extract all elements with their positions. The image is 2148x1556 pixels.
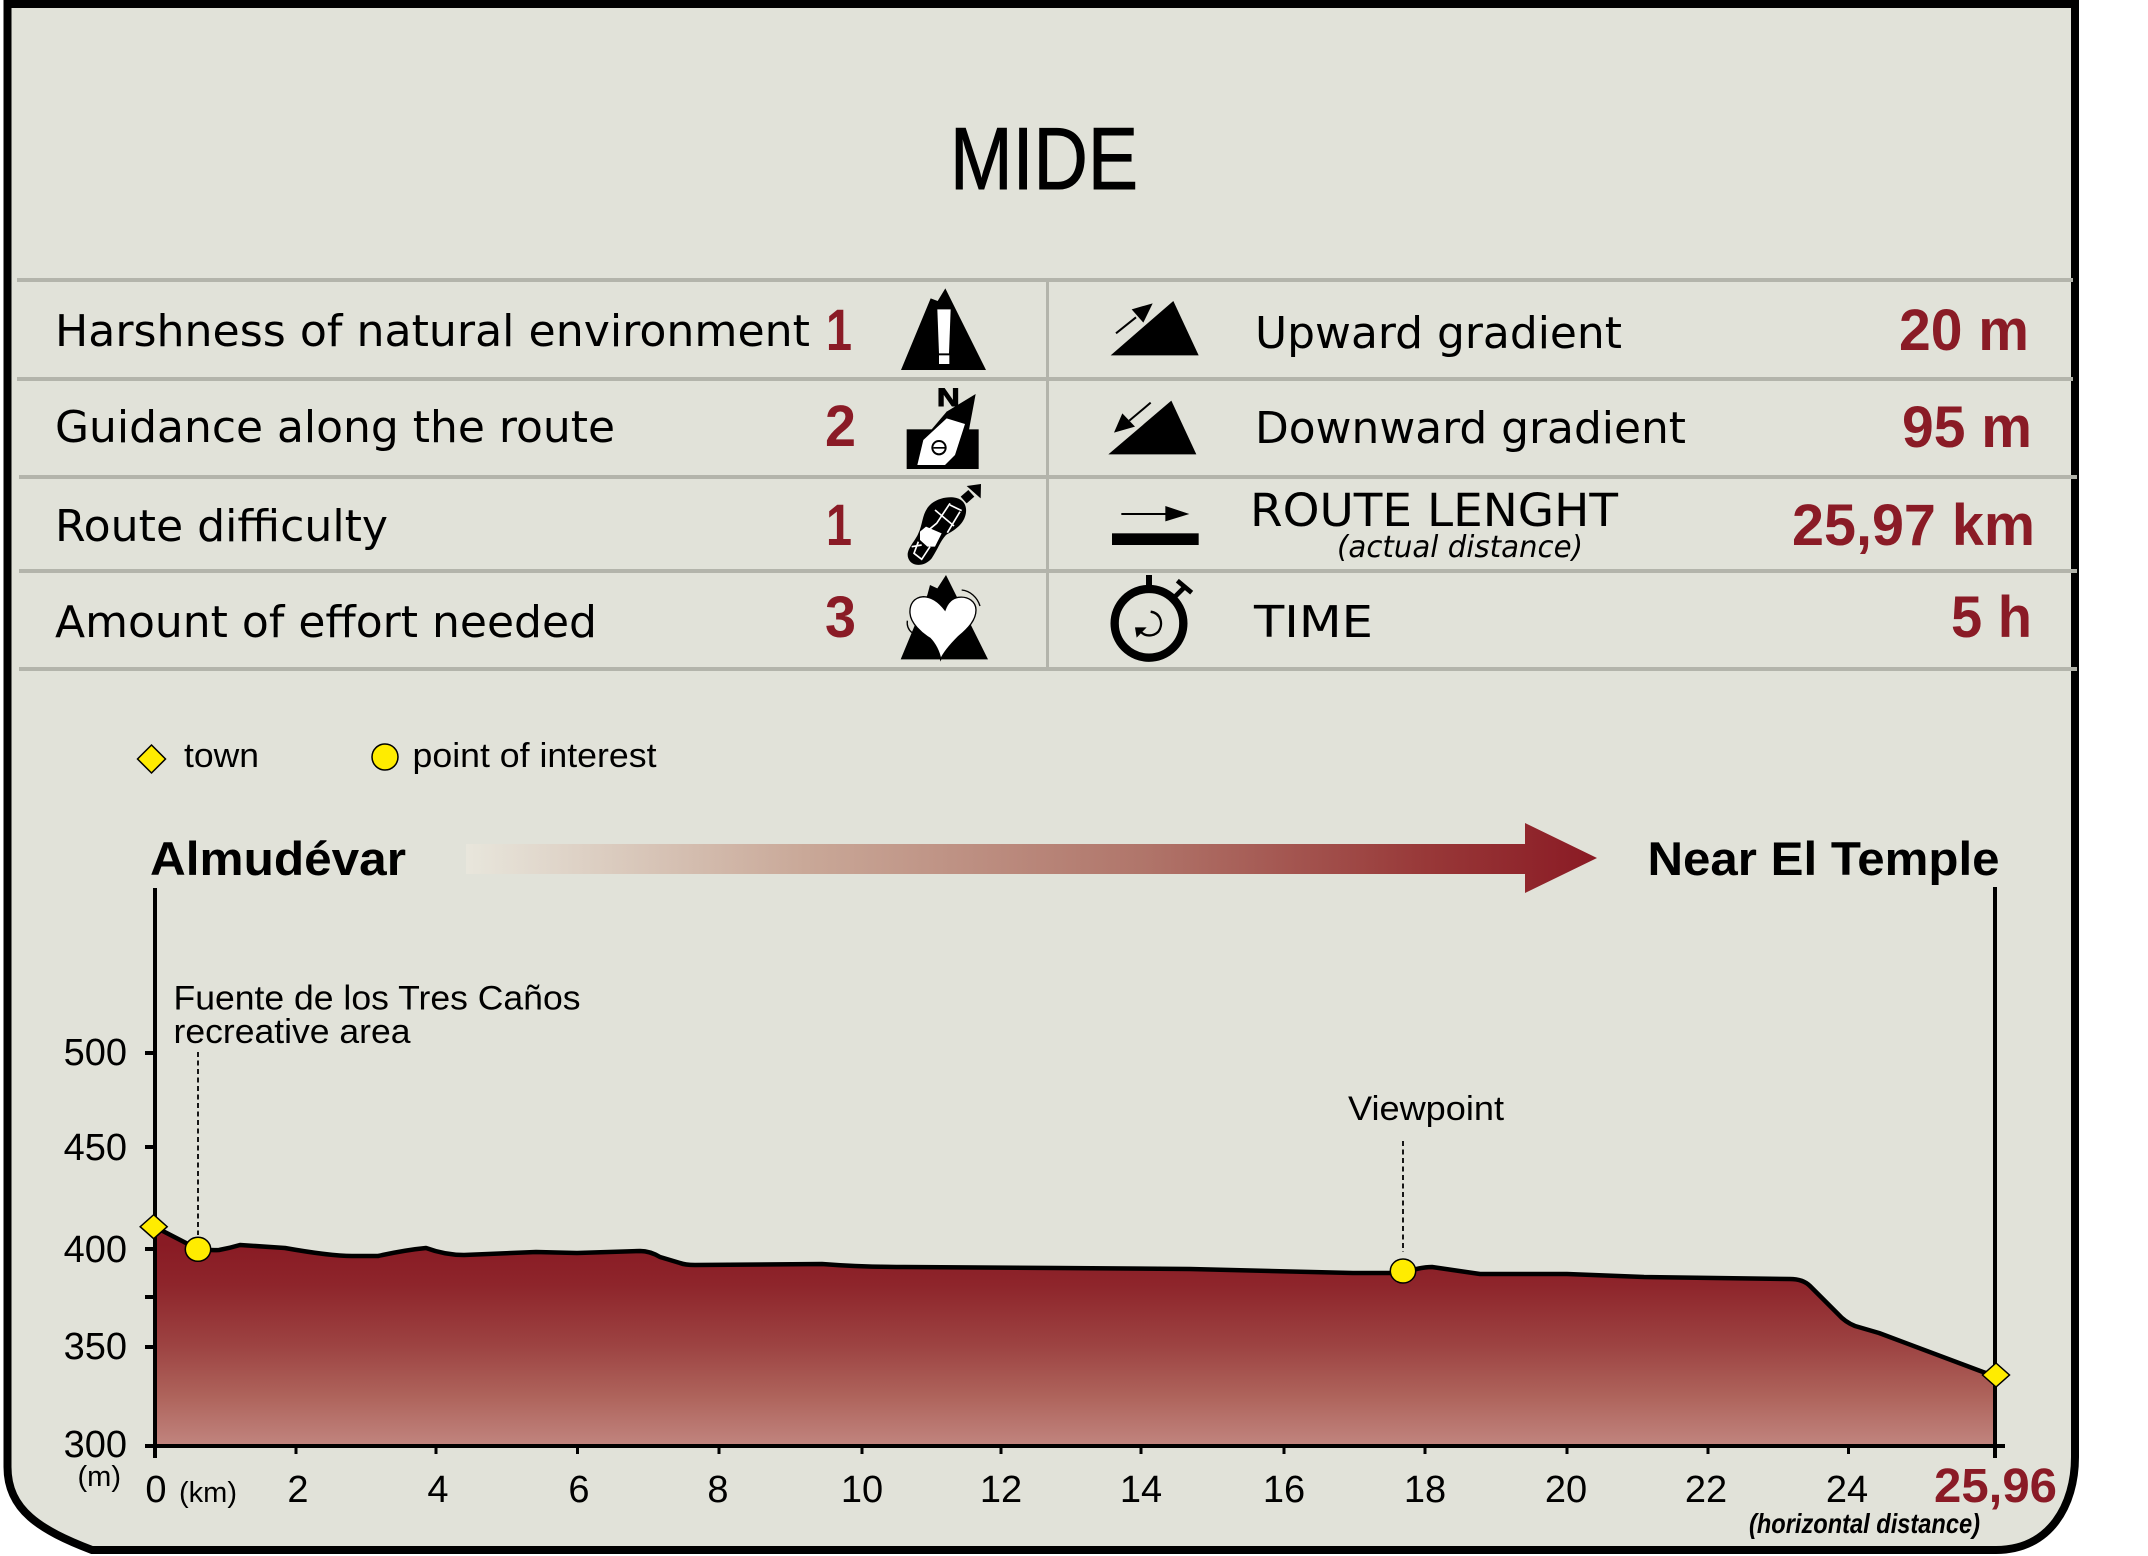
label: route difficulty: Route difficulty	[55, 501, 388, 552]
value: route difficulty: 1	[826, 493, 852, 558]
x axis labels: 18	[1404, 1469, 1446, 1511]
x axis labels: 10	[841, 1469, 883, 1511]
callout: Viewpoint: Viewpoint	[1348, 1090, 1504, 1128]
x axis labels: 12	[980, 1469, 1022, 1511]
value: upward gradient: 20 m	[1899, 298, 2029, 363]
legend label: town: town	[184, 737, 259, 775]
icon: point of interest circle	[372, 744, 398, 770]
icon: guidance compass	[907, 385, 979, 469]
icon: town diamond	[138, 745, 166, 773]
legend	[138, 737, 657, 775]
icon: guidance compass: N	[937, 385, 960, 412]
value: downward gradient: 95 m	[1902, 395, 2032, 460]
label: route length: (actual distance)	[1337, 530, 1583, 565]
value: guidance: 2	[825, 394, 856, 459]
x axis labels: 16	[1263, 1469, 1305, 1511]
marker: end town	[1982, 1363, 2010, 1387]
profile area	[155, 1227, 1995, 1446]
x axis labels: 8	[707, 1469, 729, 1511]
x axis labels: 4	[427, 1469, 449, 1511]
y axis labels: 400	[64, 1229, 127, 1271]
x axis labels: 0	[145, 1469, 167, 1511]
label: harshness: Harshness of natural environment	[55, 306, 810, 357]
panel: MIDE ratings (left table)	[55, 288, 988, 659]
icon: route length	[1112, 506, 1199, 545]
icon: route difficulty boot sole	[908, 484, 981, 565]
icon: downward gradient	[1108, 401, 1196, 454]
right boundary line	[1993, 887, 1997, 1458]
callout: Fuente de los Tres Caños: Fuente de los Tres Caños	[174, 980, 580, 1018]
title: MIDE	[950, 109, 1138, 208]
horizontal distance note: (horizontal distance)	[1749, 1508, 1980, 1539]
value: time: 5 h	[1951, 585, 2032, 650]
marker: Fuente de los Tres Caños	[185, 1237, 211, 1261]
total horizontal distance: 25,96	[1934, 1460, 2057, 1513]
label: route length	[1250, 484, 1619, 565]
y axis labels: 350	[64, 1326, 127, 1368]
callout: Fuente de los Tres Caños	[174, 980, 580, 1235]
x axis labels: 6	[568, 1469, 590, 1511]
arrow: route direction	[466, 823, 1597, 893]
label: upward gradient: Upward gradient	[1255, 308, 1622, 359]
y axis labels: 450	[64, 1127, 127, 1169]
label: time: TIME	[1253, 597, 1373, 648]
x axis labels: (km)	[179, 1477, 237, 1509]
end place name: Near El Temple	[1648, 832, 2000, 885]
value: route length: 25,97 km	[1792, 493, 2035, 558]
icon: stopwatch	[1115, 575, 1192, 658]
label: route length: ROUTE LENGHT	[1250, 484, 1619, 537]
x axis labels: 20	[1545, 1469, 1587, 1511]
x axis labels	[145, 1469, 1868, 1511]
value: harshness: 1	[826, 298, 852, 363]
marker: start town	[140, 1215, 167, 1239]
value: effort: 3	[825, 585, 856, 650]
x axis labels: 2	[287, 1469, 309, 1511]
chart: elevation profile	[64, 887, 2057, 1539]
x axis labels: 24	[1826, 1469, 1868, 1511]
label: effort: Amount of effort needed	[55, 597, 597, 648]
icon: effort heart on mountain	[901, 575, 988, 659]
panel: route data (right table)	[1108, 298, 2035, 658]
label: guidance: Guidance along the route	[55, 402, 615, 453]
x axis labels: 22	[1685, 1469, 1727, 1511]
y axis labels: 300	[64, 1424, 127, 1466]
y axis labels	[64, 1032, 127, 1493]
y axis labels: (m)	[78, 1461, 121, 1493]
label: downward gradient: Downward gradient	[1255, 403, 1686, 454]
y axis	[145, 888, 157, 1458]
x axis labels: 14	[1120, 1469, 1162, 1511]
legend label: point of interest: point of interest	[412, 737, 657, 775]
icon: upward gradient	[1111, 301, 1199, 355]
start place name: Almudévar	[150, 832, 406, 885]
x axis	[145, 1444, 2005, 1454]
callout: Fuente de los Tres Caños: recreative area	[174, 1013, 411, 1051]
y axis labels: 500	[64, 1032, 127, 1074]
marker: Viewpoint	[1390, 1259, 1416, 1283]
profile line	[155, 1227, 1995, 1376]
icon: harshness mountain warning	[901, 288, 986, 370]
